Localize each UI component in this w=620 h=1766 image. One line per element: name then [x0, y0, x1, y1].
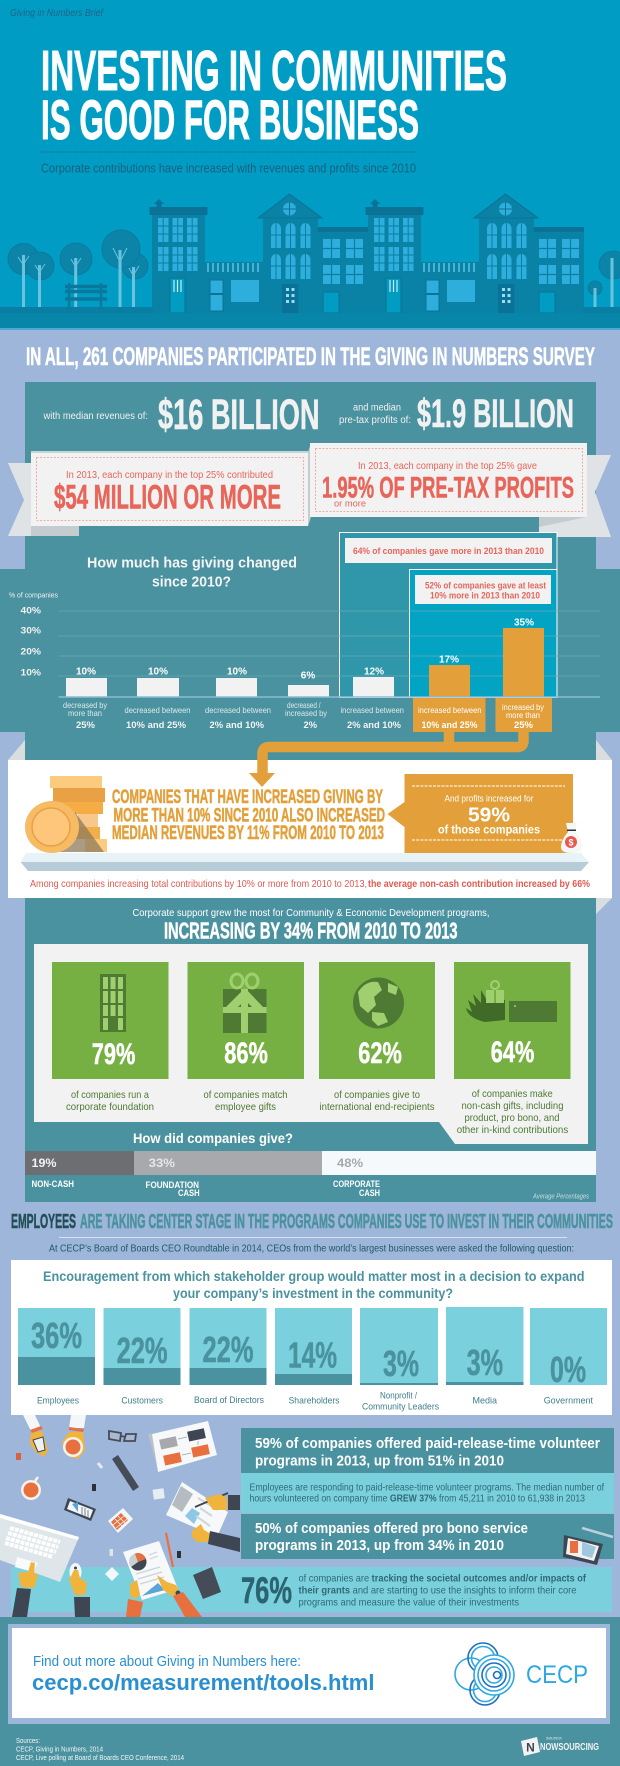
y axis: 20% [20, 646, 42, 658]
heading: companies increased giving: COMPANIES THAT HAVE INCREASED GIVING BY [112, 787, 383, 808]
panel heading: INCREASING BY 34% FROM 2010 TO 2013 [164, 918, 458, 944]
panel: volunteer programs: programs in 2013, up from 51% in 2010 [255, 1452, 504, 1470]
callout: profits increased [388, 774, 573, 853]
stat: shareholders: Shareholders [289, 1396, 340, 1406]
category labels: 25% [514, 720, 534, 731]
category labels: 10% and 25% [422, 720, 478, 731]
y axis [9, 590, 58, 678]
callout: profits increased: of those companies [438, 824, 540, 836]
panel: volunteer programs: programs in 2013, up from 34% in 2010 [255, 1537, 504, 1554]
sources: Sources: [16, 1736, 40, 1745]
chart: how did companies give: 19% [32, 1156, 57, 1170]
card: non-cash: non-cash gifts, including [462, 1100, 564, 1112]
card: international [319, 962, 435, 1113]
stat: government: 0% [550, 1349, 586, 1390]
bar values [76, 618, 534, 682]
category labels [63, 700, 545, 731]
ribbon: 54 million: In 2013, each company in the top 25% contributed [66, 469, 273, 481]
heading: companies increased giving [112, 787, 385, 844]
bar values: 6% [301, 670, 315, 682]
icon: globe [353, 978, 404, 1028]
icon: money bag [561, 823, 582, 853]
highlight box: 52 percent: 52% of companies gave at least [425, 580, 547, 592]
arrow: connector from orange boxes to banner [249, 732, 524, 787]
stat: employees: Employees [37, 1396, 79, 1406]
chart: how did companies give: FOUNDATION [146, 1180, 199, 1190]
card: foundation: of companies run a [71, 1089, 149, 1101]
category labels: 2% and 10% [210, 720, 265, 731]
subtitle: Corporate contributions have increased with revenues and profits since 2010 [41, 160, 416, 176]
median profit stat: pre-tax profits of: [339, 415, 411, 426]
card: international: of companies give to [334, 1089, 420, 1101]
chart: how did companies give: 48% [337, 1156, 363, 1170]
stat: employees: 36% [31, 1315, 82, 1356]
callout: profits increased: And profits increased for [444, 794, 534, 804]
stat: nonprofit leaders [360, 1308, 439, 1412]
card: non-cash: product, pro bono, and [464, 1112, 560, 1124]
small calculator note [105, 1567, 119, 1581]
laptop [0, 1514, 79, 1582]
median revenue stat [43, 391, 320, 439]
callout: profits increased: 59% [468, 804, 510, 826]
chart: how did companies give: CASH [178, 1188, 200, 1198]
chart: how did companies give: CASH [359, 1188, 380, 1198]
illustration: buildings [150, 194, 584, 313]
sources: CECP, Giving in Numbers, 2014 [16, 1744, 103, 1754]
sources [16, 1736, 184, 1762]
chart title [87, 554, 297, 590]
calculator [108, 1508, 133, 1533]
chart title: How much has giving changed [87, 554, 297, 572]
icon: office building [100, 974, 126, 1032]
stat: government [530, 1308, 607, 1406]
icon: gift [223, 974, 266, 1033]
ruler [112, 1455, 139, 1491]
stat: shareholders: 14% [288, 1334, 337, 1376]
highlight box: 64 percent [340, 532, 557, 698]
card: non-cash: other in-kind contributions [457, 1124, 568, 1136]
stat: board of directors [190, 1308, 266, 1406]
median revenue stat: with median revenues of: [43, 411, 148, 422]
panel: volunteer programs: hours volunteered on company time GREW 37% from 45,211 in 2010 to 61,938 in 2013 [250, 1494, 585, 1504]
y axis: 10% [20, 668, 42, 678]
note: non-cash contribution [30, 878, 591, 890]
bar values: 10% [148, 666, 168, 678]
lower left hand on laptop [12, 1562, 38, 1617]
header banner [0, 0, 620, 330]
title [41, 39, 507, 151]
category labels: more than [506, 710, 540, 720]
median profit stat [339, 392, 574, 436]
red pencil [166, 1533, 173, 1567]
category labels: decreased between [124, 705, 191, 715]
bar values: 35% [514, 618, 534, 628]
CECP logo: CECP [526, 1661, 588, 1689]
chart: how did companies give: NON-CASH [32, 1179, 74, 1189]
stat: shareholders [275, 1308, 352, 1406]
band: tracking outcomes [11, 1567, 612, 1612]
card: matching gifts: of companies match [204, 1089, 288, 1101]
median profit stat: and median [353, 402, 401, 414]
card: matching gifts: employee gifts [215, 1101, 276, 1113]
developer credit: DEVELOPED BY [546, 1736, 562, 1740]
chart: how did companies give: Average Percentages [532, 1192, 589, 1200]
note: non-cash contribution: Among companies increasing total contributions by 10% or more from 2010 to 2013, [30, 878, 367, 890]
category labels: 2% and 10% [347, 720, 402, 731]
bar values: 12% [364, 666, 384, 678]
heading: companies increased giving: MEDIAN REVENUES BY 11% FROM 2010 TO 2013 [112, 823, 384, 844]
heading: employees: EMPLOYEES [11, 1210, 76, 1233]
bar values: 10% [227, 666, 247, 678]
stat: customers: Customers [121, 1396, 163, 1406]
paper clip [98, 1463, 102, 1468]
ribbon: 54 million: $54 MILLION OR MORE [54, 478, 281, 516]
ribbon: 1.95 percent: In 2013, each company in the top 25% gave [358, 460, 537, 472]
highlight box: 52 percent [410, 570, 557, 698]
flow chart document [148, 1421, 217, 1472]
category labels: more than [68, 708, 102, 718]
stat: media: Media [472, 1396, 498, 1406]
stat: nonprofit leaders: Community Leaders [362, 1402, 439, 1412]
binder clip [92, 1484, 96, 1491]
developer credit [521, 1736, 599, 1756]
illustration: trees and bench [8, 230, 620, 307]
icon: hand with gift [466, 981, 557, 1022]
stat: customers [104, 1308, 180, 1406]
card: non-cash [454, 962, 570, 1136]
glasses [109, 1431, 136, 1441]
category labels: decreased between [205, 705, 271, 715]
sources: CECP, Live polling at Board of Boards CEO Conference, 2014 [16, 1753, 184, 1762]
y axis: 30% [20, 626, 42, 636]
y axis: % of companies [9, 590, 58, 600]
brief label: Giving in Numbers Brief [10, 7, 104, 19]
ribbon: 1.95 percent: or more [334, 498, 366, 510]
category labels: 2% [304, 720, 318, 731]
highlight box: 64 percent: 64% of companies gave more in 2013 than 2010 [353, 546, 544, 557]
card: international: international end-recipients [320, 1101, 434, 1113]
chart: how did companies give [25, 1130, 596, 1200]
panel: teal survey and chart background [0, 382, 620, 762]
stat: customers: 22% [117, 1330, 168, 1371]
category labels: increased between [340, 705, 404, 715]
stat: media [446, 1307, 524, 1406]
small eraser [16, 1453, 21, 1460]
ribbon: 54 million [8, 451, 308, 536]
category labels: 10% and 25% [126, 720, 187, 731]
illustration: desk with hands and office supplies [0, 1415, 240, 1617]
ribbon: 1.95 percent [308, 443, 611, 537]
stat: 76 percent: their grants and are starting to use the insights to inform their core [298, 1584, 577, 1596]
bar values: 17% [439, 654, 459, 666]
developer credit: NOWSOURCING [540, 1741, 599, 1753]
stat: 76 percent: 76% [241, 1570, 292, 1611]
stat: nonprofit leaders: 3% [383, 1343, 419, 1384]
ground [0, 307, 620, 330]
notebook [193, 1567, 221, 1599]
panel: stakeholder question: your company’s investment in the community? [173, 1285, 453, 1301]
panel intro: Corporate support grew the most for Community & Economic Development programs, [132, 907, 490, 919]
stat: 76 percent: programs and measure the value of their investments [298, 1596, 519, 1608]
category labels: increased by [285, 708, 328, 718]
chart document with hands [123, 1541, 202, 1617]
card: international: 62% [358, 1037, 402, 1070]
bar values: 10% [76, 666, 96, 678]
chart: how did companies give: CORPORATE [333, 1179, 380, 1189]
stat: board of directors: 22% [202, 1329, 254, 1370]
hand on mouse [69, 1563, 90, 1617]
heading: companies increased giving: MORE THAN 10% SINCE 2010 ALSO INCREASED [114, 806, 385, 826]
stat: 76 percent [241, 1570, 586, 1611]
orange category boxes [413, 698, 552, 732]
median revenue stat: $16 BILLION [158, 391, 320, 439]
coffee cup [21, 1477, 41, 1500]
category labels: decreased / [287, 700, 321, 710]
top hands with tablet and cup [23, 1415, 86, 1459]
stat: board of directors: Board of Directors [194, 1395, 264, 1406]
category labels: increased by [502, 702, 545, 712]
category labels: 25% [76, 720, 96, 731]
call to action box [12, 1628, 606, 1718]
call to action box: Find out more about Giving in Numbers here: [33, 1653, 301, 1670]
highlight box: 52 percent: 10% more in 2013 than 2010 [430, 590, 540, 602]
card: foundation: 79% [92, 1038, 135, 1071]
stat: nonprofit leaders: Nonprofit / [380, 1390, 417, 1402]
panel: corporate support [25, 898, 612, 1202]
bars [66, 628, 544, 697]
category labels: increased between [418, 705, 482, 715]
panel: stakeholder question [11, 1260, 612, 1415]
card: foundation: corporate foundation [66, 1101, 154, 1113]
card: non-cash: of companies make [472, 1088, 553, 1100]
chart: how did companies give: 33% [149, 1156, 175, 1170]
report with pen and hands [166, 1482, 240, 1552]
chart title: since 2010? [152, 574, 231, 590]
category labels: decreased by [63, 700, 108, 710]
footer [0, 1617, 620, 1766]
icon: tablet and pen [563, 1528, 613, 1565]
y axis: 40% [20, 606, 42, 616]
stat: employees [18, 1308, 95, 1406]
card: matching gifts [188, 962, 304, 1113]
stat: government: Government [544, 1396, 593, 1406]
stat: 76 percent: of companies are tracking the societal outcomes and/or impacts of [298, 1572, 586, 1584]
card: foundation [52, 962, 168, 1113]
icon: coin stack [25, 776, 107, 853]
white banner [8, 760, 612, 898]
call to action box: cecp.co/measurement/tools.html [32, 1670, 374, 1695]
chart: how did companies give: How did companies give? [133, 1130, 293, 1146]
phone [64, 1498, 96, 1521]
card: matching gifts: 86% [224, 1037, 268, 1070]
survey intro: At CECP’s Board of Boards CEO Roundtable in 2014, CEOs from the world’s largest businesses were asked the following question: [49, 1244, 574, 1254]
chart: how much has giving changed [9, 532, 600, 732]
stat: media: 3% [467, 1342, 503, 1383]
card: non-cash: 64% [491, 1036, 534, 1069]
icon: money bag: $ [568, 838, 574, 848]
developer credit: N [526, 1740, 535, 1754]
panel: volunteer programs [241, 1428, 614, 1559]
CECP logo [455, 1643, 588, 1705]
shelf [20, 853, 589, 871]
sticky note [152, 1488, 165, 1500]
panel: volunteer programs: 50% of companies offered pro bono service [255, 1520, 528, 1537]
